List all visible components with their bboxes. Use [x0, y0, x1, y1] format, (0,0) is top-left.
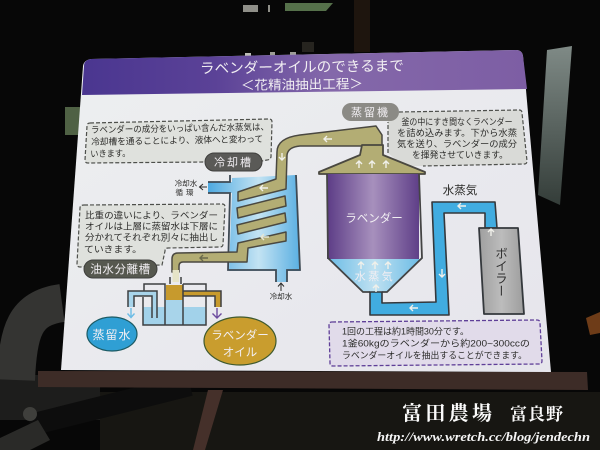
watermark: farm name [402, 397, 563, 426]
label pill: distiller [342, 103, 399, 121]
hood [319, 145, 425, 174]
subtitle: ＜花精油抽出工程＞ [241, 76, 363, 93]
coil turn 3 [237, 213, 286, 234]
note text: 1釜60kgのラベンダーから約200~300ccの [342, 338, 530, 348]
explanation text: 比重の違いにより、ラベンダー [85, 210, 218, 220]
text box fill [388, 110, 527, 166]
text box outline [77, 204, 225, 267]
pipe from distiller [238, 126, 382, 201]
label: cooling water inlet [270, 283, 293, 301]
separator tank [128, 277, 221, 325]
output: lavender oil [204, 317, 276, 365]
panel: cooling tank explanation [85, 119, 272, 171]
distilled water outlet pipe [128, 291, 157, 318]
output: distilled water: 蒸留水 [92, 328, 132, 342]
cooling tank [208, 175, 300, 282]
arrow: lavender oil [212, 308, 222, 318]
tank walls [208, 175, 300, 282]
explanation text: ていきます。 [84, 244, 142, 254]
steam pipe [370, 202, 497, 315]
coil pipe [172, 126, 382, 272]
title: ラベンダーオイルのできるまで [200, 58, 404, 77]
flow arrows [200, 136, 494, 311]
explanation text: ラベンダーの成分をいっぱい含んだ水蒸気は、 [91, 121, 269, 135]
label pill: cooling tank [205, 153, 262, 171]
label: cooling water inlet: 冷却水 [270, 291, 293, 301]
steam cone [328, 259, 420, 292]
outlet pipe [172, 232, 286, 272]
label: lavender: ラベンダー [345, 211, 403, 225]
explanation text: 釜の中にすき間なくラベンダー [402, 116, 512, 127]
text box outline [85, 119, 272, 163]
distillation pot [319, 145, 425, 292]
boiler: ボイラー [493, 247, 507, 297]
watermark: farm name: 富田農場 [402, 397, 492, 426]
label pill: separator: 油水分離槽 [90, 262, 151, 276]
note: process yield [329, 320, 542, 366]
boiler [479, 228, 524, 314]
explanation text: 気を送り、ラベンダーの成分 [397, 138, 517, 149]
water [143, 307, 206, 325]
label: cooling water circulation [175, 178, 207, 197]
label pill: separator [84, 260, 157, 278]
output: lavender oil: ラベンダー [211, 328, 269, 342]
label: steam heading: 水蒸気 [443, 183, 478, 197]
wooden shelf [38, 371, 588, 390]
label: cooling water circulation: 循環 [176, 187, 196, 197]
note text [342, 326, 530, 360]
tank water [208, 175, 300, 282]
watermark: url: http://www.wretch.cc/blog/jendechn [377, 429, 590, 444]
explanation text: 分かれてそれぞれ別々に抽出し [85, 232, 218, 242]
note text: ラベンダーオイルを抽出することができます。 [342, 350, 527, 360]
pot outline [327, 174, 422, 292]
central chamber water [165, 300, 183, 325]
panel: distiller explanation [342, 103, 527, 166]
header band [82, 50, 527, 95]
label pill: cooling tank: 冷却槽 [214, 156, 253, 169]
outlines [128, 277, 221, 325]
label: cooling water circulation: 冷却水 [175, 178, 198, 188]
sign board [61, 50, 551, 372]
note text: 1回の工程は約1時間30分です。 [342, 326, 469, 336]
panel: oil-water separation explanation [77, 204, 225, 278]
pot body [327, 174, 419, 259]
explanation text [397, 116, 517, 160]
arrow: distilled water [128, 308, 134, 318]
coil turn 2 [237, 196, 286, 218]
board surface [61, 50, 551, 372]
explanation text: オイルは上層に蒸留水は下層に [85, 220, 218, 232]
label: steam: 水蒸気 [355, 269, 395, 283]
explanation text [84, 210, 218, 254]
label pill: distiller: 蒸留機 [351, 106, 390, 119]
explanation text: を揮発させていきます。 [412, 149, 508, 160]
watermark: farm name: 富良野 [510, 400, 563, 425]
output: lavender oil: オイル [223, 346, 257, 359]
dashed outline [388, 110, 527, 166]
explanation text [90, 121, 269, 159]
output: distilled water [87, 317, 137, 351]
explanation text: 冷却槽を通ることにより、液体へと変わって [91, 133, 263, 147]
oil layer [166, 285, 221, 307]
pale stem to separator [172, 270, 179, 282]
note box [329, 320, 542, 366]
explanation text: いきます。 [90, 148, 130, 159]
explanation text: を詰め込みます。下から水蒸 [397, 127, 517, 138]
